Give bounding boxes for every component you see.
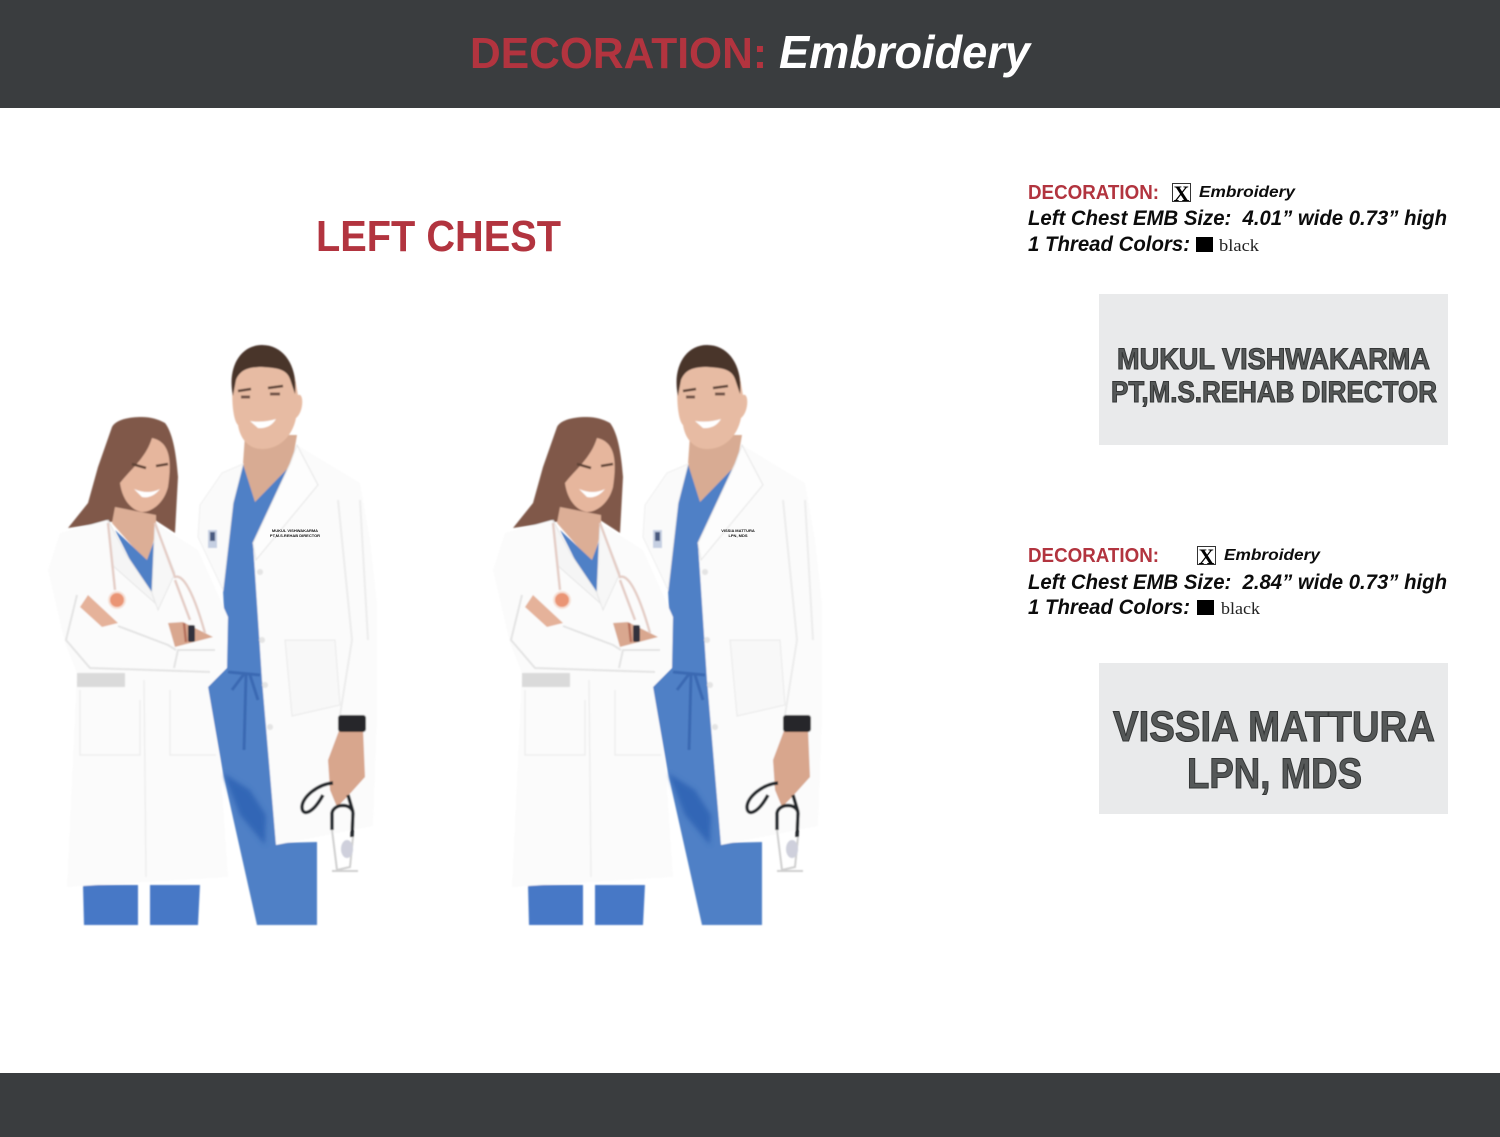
embroidery sample 1: PT,M.S.REHAB DIRECTOR: [1111, 376, 1437, 409]
title: DECORATION:: [470, 29, 767, 78]
photo: staff in lab coats, name 1: MUKUL VISHWAKARMA: [272, 528, 318, 533]
spec block 2: Embroidery: [1224, 547, 1321, 564]
spec block 1: black: [1219, 236, 1260, 255]
spec block 2: X: [1199, 544, 1215, 569]
header bar: [0, 0, 1500, 108]
spec block 1: [1028, 181, 1447, 256]
embroidery sample 2: [1099, 663, 1448, 814]
embroidery sample 2: VISSIA MATTURA: [1113, 703, 1435, 751]
embroidery sample 1: [1099, 294, 1448, 445]
embroidery sample 1: MUKUL VISHWAKARMA: [1117, 343, 1430, 376]
photo: staff in lab coats, name 1: PT,M.S.REHAB DIRECTOR: [270, 533, 320, 538]
footer bar: [0, 1073, 1500, 1137]
photo: staff in lab coats, name 2: LPN, MDS: [728, 533, 748, 538]
spec block 1: DECORATION:: [1028, 182, 1159, 204]
spec block 1: X: [1174, 181, 1190, 206]
title: [470, 26, 1032, 78]
spec block 2: black: [1221, 599, 1261, 618]
spec block 1: 1 Thread Colors:: [1028, 233, 1190, 256]
spec block 2: [1028, 544, 1447, 619]
spec block 2: Left Chest EMB Size: 2.84” wide 0.73” high: [1028, 571, 1447, 594]
heading: left chest: LEFT CHEST: [316, 212, 561, 261]
photo: staff in lab coats, name 1: [48, 345, 377, 925]
embroidery sample 2: LPN, MDS: [1187, 750, 1362, 798]
photo: staff in lab coats, name 2: [493, 345, 822, 925]
photo: staff in lab coats, name 2: VISSIA MATTURA: [721, 528, 755, 533]
spec block 2: DECORATION:: [1028, 545, 1159, 567]
spec block 1: Embroidery: [1199, 184, 1296, 201]
spec block 1: Left Chest EMB Size: 4.01” wide 0.73” high: [1028, 207, 1447, 230]
spec block 2: 1 Thread Colors:: [1028, 596, 1190, 619]
title: Embroidery: [779, 26, 1032, 78]
